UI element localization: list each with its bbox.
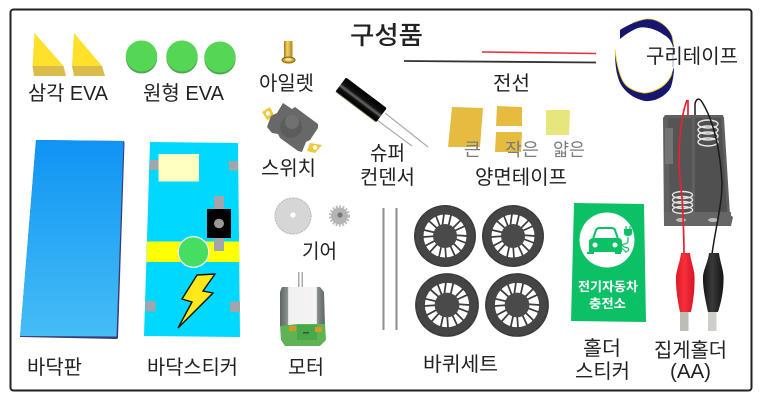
labels: tape sizes: 작은 [505, 140, 539, 160]
icon: lightning bolt [178, 274, 215, 328]
labels: tape sizes: 얇은 [553, 140, 585, 160]
icon: axles [382, 208, 398, 330]
label: clip holder [654, 339, 727, 383]
text: charging station [578, 279, 639, 311]
label: super capacitor: 컨덴서 [360, 166, 415, 189]
icon: eyelet [282, 41, 295, 63]
icon: motor [280, 272, 326, 346]
label: holder sticker: 스티커 [575, 360, 630, 383]
icon: gears [274, 198, 349, 234]
label: holder sticker: 홀더 [583, 337, 621, 360]
icon: super capacitor [335, 77, 428, 147]
label: copper tape: 구리테이프 [646, 45, 738, 68]
label: holder sticker [575, 337, 630, 383]
icon: round EVA [126, 40, 236, 74]
icon: wheels [414, 205, 549, 337]
labels: tape sizes: 큰 [464, 140, 481, 160]
text: charging station: 전기자동차 [578, 279, 639, 294]
label: base sticker: 바닥스티커 [147, 356, 238, 379]
icon: triangle EVA [32, 33, 105, 76]
panel: base board [20, 140, 124, 339]
icon: copper tape loop [615, 19, 674, 101]
icon: wires [404, 52, 596, 62]
label: gears: 기어 [302, 240, 337, 263]
icon: red wire [679, 100, 688, 254]
label: motor: 모터 [288, 356, 324, 379]
icon: switch [262, 103, 322, 153]
icon: electric car [587, 226, 632, 253]
icon: red clip [676, 253, 695, 331]
label: wires: 전선 [493, 72, 530, 95]
text: charging station: 충전소 [589, 297, 626, 311]
icon: black wire [695, 99, 722, 254]
label: round EVA: 원형 EVA [143, 82, 225, 105]
label: super capacitor [360, 142, 415, 189]
panel: base sticker [144, 142, 240, 337]
label: eyelet: 아일렛 [259, 72, 314, 95]
label: wheel set: 바퀴세트 [423, 353, 498, 376]
title: 구성품 [350, 22, 423, 50]
label: triangle EVA: 삼각 EVA [28, 82, 109, 105]
icon: battery holder with clips [663, 99, 733, 331]
label: clip holder: 집게홀더 [654, 339, 727, 362]
labels: tape sizes [464, 140, 585, 160]
label: super capacitor: 슈퍼 [370, 142, 405, 165]
label: clip holder: (AA) [670, 361, 711, 383]
label: double-sided tape: 양면테이프 [475, 166, 567, 189]
panel: holder sticker [571, 203, 646, 322]
label: base board: 바닥판 [27, 356, 82, 379]
icon: black clip [703, 253, 724, 331]
icon: double-sided tape pieces [448, 106, 570, 152]
label: switch: 스위치 [261, 157, 316, 180]
